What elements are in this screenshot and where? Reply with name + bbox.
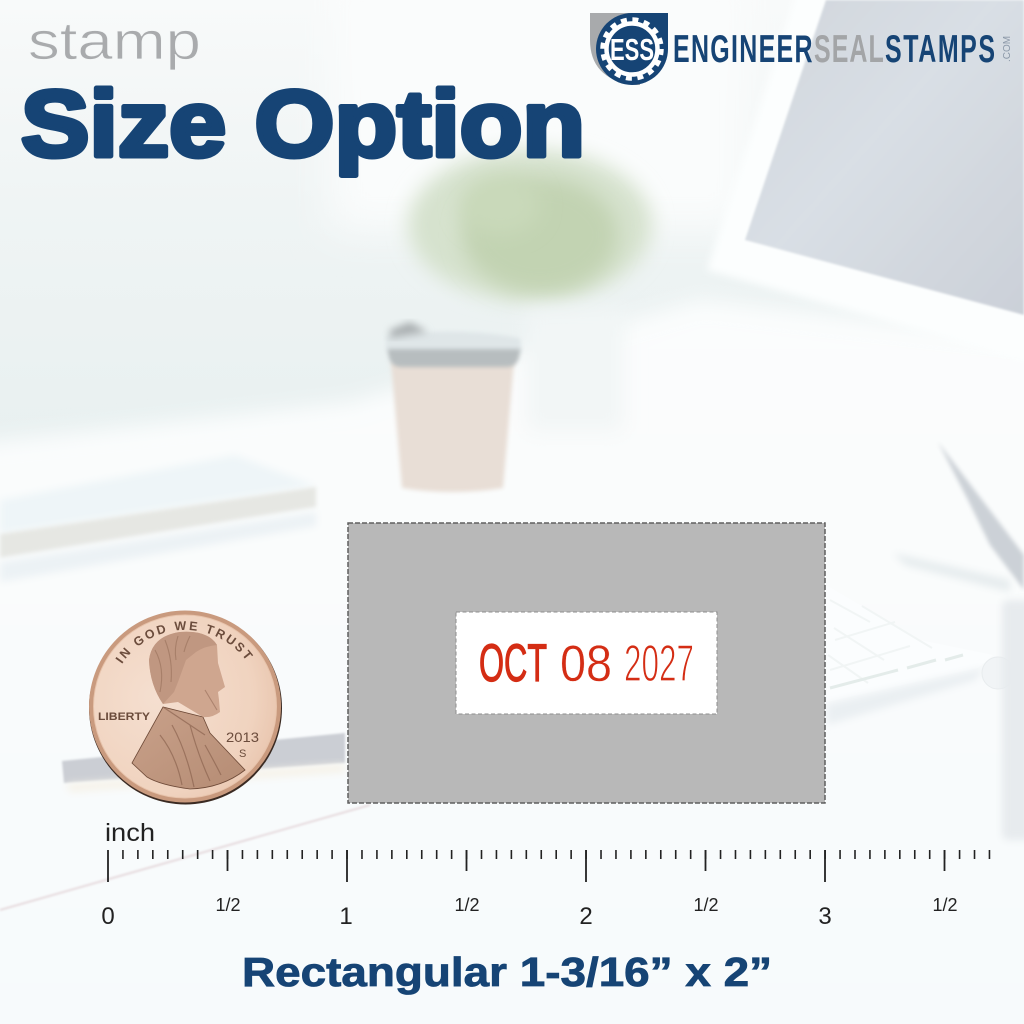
ruler half labels	[215, 895, 958, 915]
logo: Engineer Seal Stamps	[590, 13, 1013, 85]
penny coin for scale	[89, 610, 282, 804]
coin lettering: S	[239, 748, 246, 760]
date text: 08	[560, 635, 612, 692]
coin lettering: IN GOD WE TRUST	[116, 621, 254, 664]
ruler half labels: 1/2	[932, 895, 958, 915]
main title: Size Option: Size Option	[21, 71, 585, 176]
white date window	[456, 612, 717, 714]
ruler inch numbers	[101, 903, 832, 930]
coin lettering: LIBERTY	[98, 711, 151, 723]
grey stamp body	[348, 523, 825, 803]
ruler half labels: 1/2	[215, 895, 241, 915]
ruler unit label: inch	[105, 819, 155, 847]
ruler inch numbers: 3	[818, 903, 832, 930]
ruler half labels: 1/2	[693, 895, 719, 915]
logo emblem: ESS	[610, 32, 654, 67]
logo wordmark: ENGINEER	[673, 26, 813, 70]
blurred pens and holder	[62, 442, 1024, 840]
coin lettering	[98, 621, 259, 760]
blurred plant	[408, 149, 652, 432]
ruler half labels: 1/2	[454, 895, 480, 915]
date text	[479, 634, 694, 693]
ruler ticks	[108, 850, 989, 882]
size caption: Rectangular 1-3/16” x 2”	[242, 949, 772, 995]
ruler inch numbers: 1	[339, 903, 353, 930]
date text: OCT	[479, 634, 547, 693]
blurred coffee cup	[386, 322, 522, 492]
stamp impression area	[348, 523, 825, 803]
ruler inch numbers: 2	[579, 903, 593, 930]
desk edge reflection	[0, 805, 370, 910]
logo wordmark: SEAL	[814, 26, 884, 70]
monitor	[707, 0, 1024, 364]
date text: 2027	[624, 635, 694, 693]
logo wordmark	[673, 26, 1013, 70]
blurred notebook	[0, 455, 316, 582]
logo emblem	[590, 13, 668, 85]
coin lettering: 2013	[226, 729, 259, 745]
ruler	[101, 819, 989, 930]
logo wordmark: STAMPS	[885, 26, 995, 70]
small title: stamp: stamp	[28, 12, 201, 71]
coin bust of Lincoln	[132, 632, 245, 789]
blurred keyboard	[826, 585, 1014, 725]
ruler inch numbers: 0	[101, 903, 115, 930]
logo wordmark: .COM	[1002, 36, 1013, 62]
